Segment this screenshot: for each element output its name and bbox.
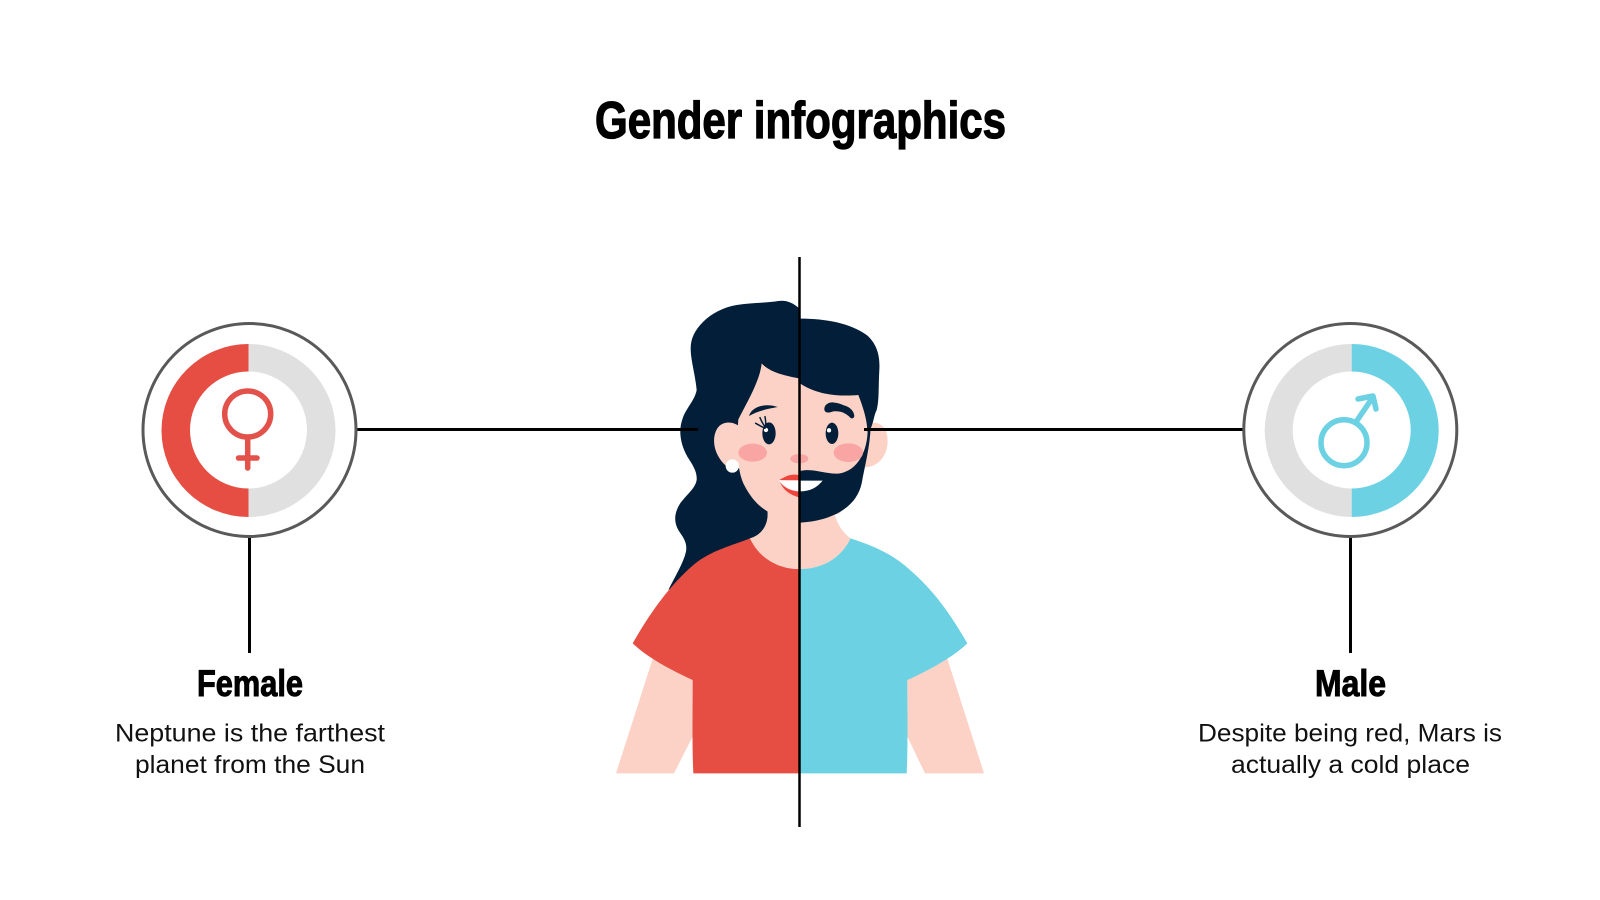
illustration: half female, half male person <box>616 301 984 773</box>
male description: Despite being red, Mars is <box>1198 720 1502 748</box>
female label: Female <box>197 663 303 704</box>
cheeks and nose <box>738 443 863 463</box>
icon: female symbol <box>225 391 271 468</box>
right vertical connector <box>1349 536 1352 653</box>
center vertical line <box>798 257 801 827</box>
neck <box>750 493 851 569</box>
female shirt half <box>633 538 799 773</box>
eyebrows <box>749 402 854 418</box>
arms <box>616 657 984 773</box>
left connector line <box>357 428 698 431</box>
right connector line <box>864 428 1243 431</box>
male label: Male <box>1315 663 1386 704</box>
female description: Neptune is the farthest <box>115 720 385 748</box>
face <box>737 363 869 523</box>
male donut badge <box>1244 324 1457 536</box>
female hair <box>668 301 799 590</box>
male shirt half <box>800 538 967 773</box>
female donut badge <box>143 324 356 536</box>
mouth <box>779 475 823 497</box>
eyes <box>756 417 838 444</box>
male description: actually a cold place <box>1231 751 1470 779</box>
ears <box>714 422 888 470</box>
male hair and sideburn <box>800 319 879 432</box>
left vertical connector <box>248 536 251 653</box>
icon: male symbol <box>1321 396 1376 466</box>
title: Gender infographics <box>595 92 1006 150</box>
beard <box>800 427 871 523</box>
earring <box>726 459 739 473</box>
female description: planet from the Sun <box>135 751 365 779</box>
